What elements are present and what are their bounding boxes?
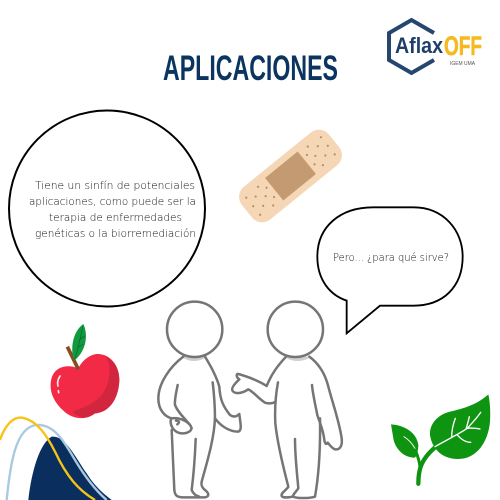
figure: left person bbox=[158, 302, 241, 497]
panel: circle with description: terapia de enfermedades bbox=[49, 211, 182, 224]
logo: AflaxOFF: OFF bbox=[444, 31, 482, 61]
speech bubble: Pero... ¿para qué sirve? bbox=[333, 251, 449, 264]
decorative waves bottom-left bbox=[0, 418, 112, 500]
figure: right person bbox=[232, 302, 342, 498]
panel: circle with description: genéticas o la biorremediación bbox=[35, 227, 196, 240]
panel: circle with description: Tiene un sinfín de potenciales bbox=[35, 179, 195, 192]
speech bubble bbox=[317, 207, 463, 333]
icon: apple bbox=[51, 324, 119, 418]
logo: AflaxOFF: IGEM UMA bbox=[450, 61, 476, 67]
icon: bandage bbox=[234, 124, 347, 228]
title: APLICACIONES bbox=[163, 49, 338, 88]
panel: circle with description bbox=[9, 110, 205, 306]
icon: green plant bbox=[391, 394, 490, 484]
logo: AflaxOFF: Aflax bbox=[395, 33, 444, 58]
logo: AflaxOFF bbox=[389, 20, 482, 73]
panel: circle with description: aplicaciones, como puede ser la bbox=[29, 195, 196, 208]
